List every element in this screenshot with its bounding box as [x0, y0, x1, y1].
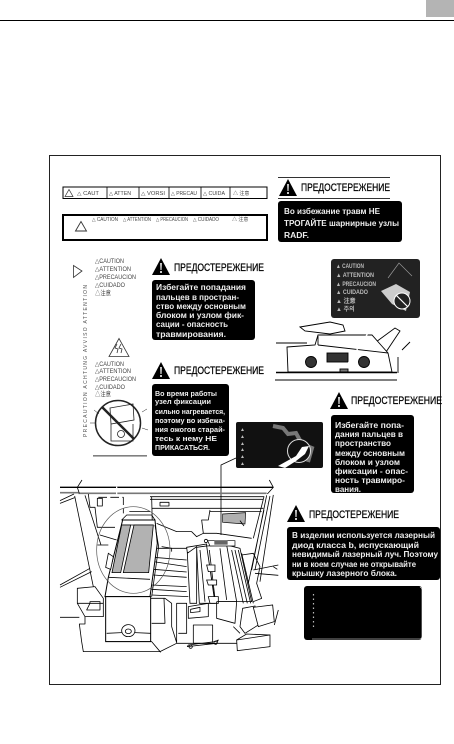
caution block: hot fuser: Во время работы — [155, 389, 217, 398]
center upper housing — [150, 497, 264, 538]
label box: warning banner: △ CAUTION — [92, 217, 118, 223]
caution block: hot fuser: поэтому во избежа- — [155, 416, 225, 425]
warning sticker: pinch point: ▲ — [240, 434, 245, 440]
caution block: fuser pinch: сации - опасность — [156, 320, 228, 329]
caution block: laser diode: ПРЕДОСТЕРЕЖЕНИЕ — [309, 509, 399, 521]
laser unit — [105, 512, 159, 597]
vertical multilingual text: PRECAUTION ACHTUNG AVVISO ATTENTION — [83, 285, 89, 437]
lower center parts — [151, 598, 187, 643]
caution block: fuser pinch: блоком и узлом фик- — [156, 311, 244, 320]
right side parts — [242, 553, 262, 602]
caution block: pinch between units: дания пальцев в — [335, 430, 403, 439]
lower left base — [77, 587, 103, 617]
caution language list lower: △CAUTION — [95, 361, 124, 368]
caution block: fuser pinch: ПРЕДОСТЕРЕЖЕНИЕ — [174, 262, 264, 274]
caution block: fuser pinch: ство между основным — [156, 302, 246, 311]
warning sticker: laser unit — [304, 586, 422, 640]
label strip: multilingual caution: △ 注意 — [233, 190, 249, 197]
label box: warning banner: △ 注意 — [232, 216, 248, 223]
caution block: laser diode: диод класса b, испускающий — [292, 541, 419, 550]
caution block: pinch between units: пространство — [335, 439, 391, 448]
label strip: multilingual caution — [63, 187, 267, 198]
label strip: multilingual caution: △ PRECAU — [171, 191, 197, 197]
fuser assembly — [187, 544, 207, 553]
warning sticker: document feeder: ▲ ATTENTION — [336, 273, 374, 279]
icon: hot surface triangle — [109, 338, 129, 356]
caution language list upper: △ATTENTION — [95, 266, 131, 273]
lower unit body — [106, 597, 151, 642]
warning sticker: pinch point — [236, 422, 323, 468]
caution language list upper: △CUIDADO — [95, 282, 125, 289]
label box: warning banner — [63, 215, 267, 240]
machine top edge — [60, 485, 273, 489]
caution block: pinch between units: вания. — [335, 485, 361, 494]
warning sticker: document feeder: ▲ 주의 — [336, 305, 355, 313]
caution block: RADF hinges: RADF. — [284, 231, 309, 240]
caution block: hot fuser: сильно нагревается, — [155, 407, 225, 416]
label strip: multilingual caution: △ CAUT — [77, 191, 99, 197]
caution block: laser diode: В изделии используется лазерный — [292, 531, 435, 540]
label strip: multilingual caution: △ VORSI — [141, 191, 165, 197]
label box: warning banner: △ ATTENTION — [123, 217, 151, 223]
caution block: pinch between units — [330, 392, 442, 494]
warning sticker: document feeder: ▲ PRECAUCION — [336, 282, 376, 288]
lower right blocks — [240, 606, 258, 633]
label box: warning banner: △ PRECAUCION — [156, 217, 188, 223]
caution language list lower: △注意 — [95, 389, 111, 398]
caution block: pinch between units: Избегайте попа- — [335, 421, 404, 430]
caution block: laser diode: ни в коем случае не открывайте — [292, 560, 417, 569]
caution block: pinch between units: ность травмиро- — [335, 476, 405, 485]
gray window — [223, 513, 246, 524]
label strip: multilingual caution: △ ATTEN — [109, 191, 131, 197]
caution language list upper — [95, 258, 136, 297]
caution language list lower: △PRECAUCION — [95, 376, 136, 383]
label box: warning banner: △ CUIDADO — [193, 217, 219, 223]
caution block: fuser pinch: пальцев в простран- — [156, 293, 239, 302]
caution block: fuser pinch: травмирования. — [156, 330, 226, 339]
caution block: hot fuser — [152, 362, 264, 456]
warning sticker: document feeder: ▲ CAUTION — [336, 264, 364, 270]
caution language list upper: △PRECAUCION — [95, 274, 136, 281]
left frame — [60, 494, 115, 587]
warning sticker: document feeder: ▲ CUIDADO — [336, 290, 368, 296]
caution language list lower: △CUIDADO — [95, 384, 125, 391]
caution language list lower — [95, 361, 136, 398]
caution block: pinch between units: блоком и узлом — [335, 458, 400, 467]
icon: do not touch hot unit — [90, 400, 148, 446]
caution language list upper: △CAUTION — [95, 258, 124, 265]
caution block: hot fuser: ПРИКАСАТЬСЯ. — [155, 443, 210, 452]
caution language list lower: △ATTENTION — [95, 368, 131, 375]
caution block: RADF hinges — [278, 177, 402, 242]
caution block: laser diode: крышку лазерного блока. — [292, 569, 397, 578]
machine interior drawing — [60, 480, 278, 652]
scanner drawing with feeder — [275, 322, 410, 380]
page tab — [426, 0, 454, 17]
caution block: RADF hinges: ТРОГАЙТЕ шарнирные узлы — [284, 219, 399, 228]
caution block: laser diode: невидимый лазерный луч. Поэтому — [292, 550, 439, 559]
callout line: scanner — [347, 330, 370, 365]
warning sticker: document feeder: ▲ 注意 — [336, 297, 356, 305]
caution language list upper: △注意 — [95, 288, 111, 297]
warning sticker: pinch point: ▲ — [240, 461, 245, 467]
header rule — [0, 20, 454, 21]
caution block: hot fuser: ПРЕДОСТЕРЕЖЕНИЕ — [174, 365, 264, 377]
caution block: pinch between units: между основным — [335, 449, 405, 458]
caution block: fuser pinch: Избегайте попадания — [156, 283, 246, 292]
callout line: pinch sticker — [221, 458, 236, 535]
figure frame — [50, 156, 440, 684]
warning sticker: pinch point: ▲ — [240, 454, 245, 460]
warning sticker: document feeder — [331, 259, 420, 318]
caution block: hot fuser: узел фиксации — [155, 397, 211, 406]
caution block: fuser pinch — [152, 258, 264, 340]
warning sticker: pinch point: ▲ — [240, 427, 245, 433]
caution block: pinch between units: фиксации - опас- — [335, 467, 408, 476]
caution block: hot fuser: тесь к нему НЕ — [155, 434, 217, 443]
label strip: multilingual caution: △ CUIDA — [203, 191, 226, 197]
right frame bars — [248, 495, 273, 583]
paper path stripes — [152, 548, 188, 597]
warning sticker: pinch point: ▲ — [240, 447, 245, 453]
caution block: RADF hinges: ПРЕДОСТЕРЕЖЕНИЕ — [301, 182, 390, 194]
caution block: laser diode — [287, 505, 440, 580]
caution block: RADF hinges: Во избежание травм НЕ — [284, 207, 381, 216]
magnifier circle — [97, 507, 170, 593]
caution block: hot fuser: ния ожогов старай- — [155, 425, 225, 434]
arrow marker — [74, 266, 82, 278]
warning sticker: pinch point: ▲ — [240, 441, 245, 447]
